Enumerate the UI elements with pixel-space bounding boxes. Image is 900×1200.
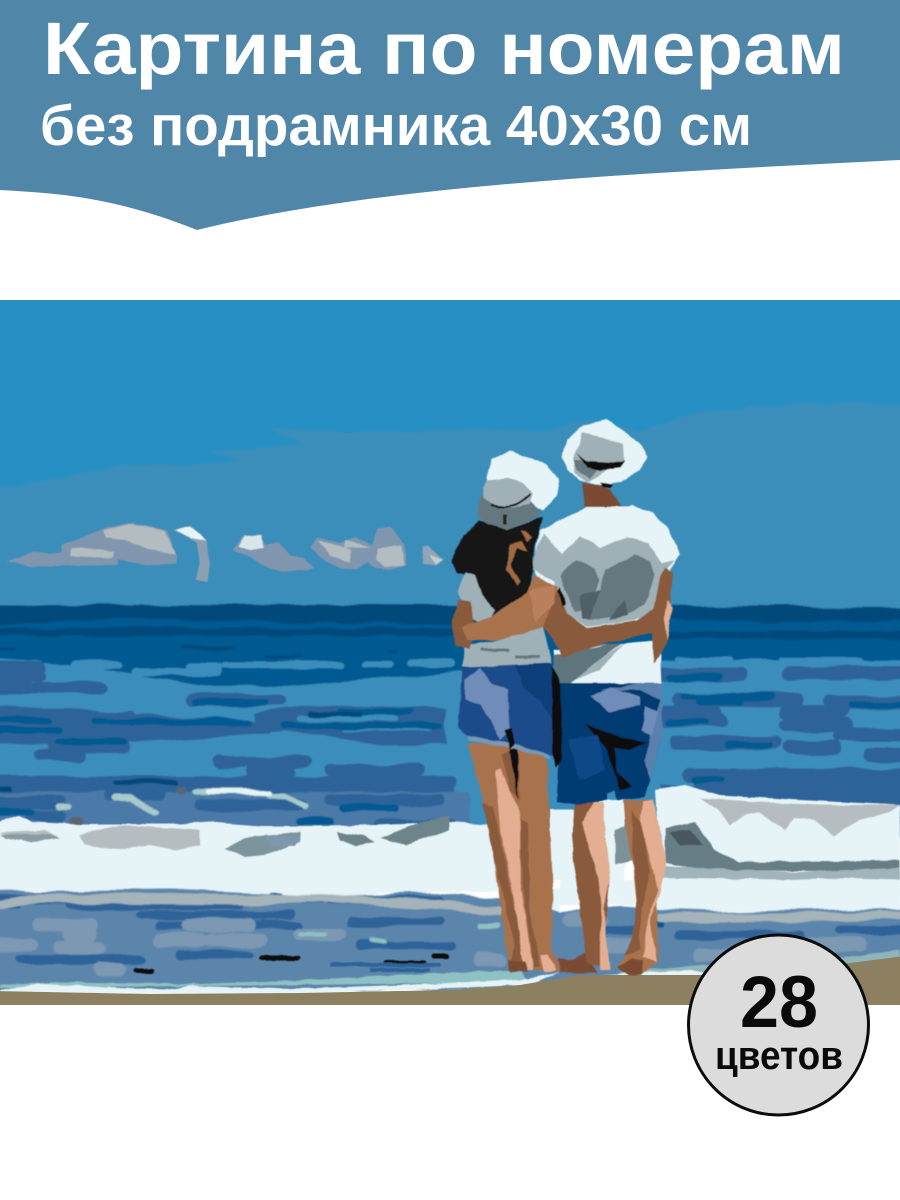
surf foam	[0, 785, 900, 912]
shallow water	[0, 890, 900, 990]
sky	[0, 290, 900, 610]
clouds	[7, 523, 443, 582]
man hat	[562, 420, 648, 488]
header banner	[0, 0, 900, 230]
man torso shirt	[532, 505, 680, 640]
sand	[0, 956, 900, 1005]
badge label: цветов	[715, 1034, 843, 1078]
man right arm	[652, 568, 673, 663]
man neck	[582, 482, 622, 507]
badge: 28 colours	[688, 935, 868, 1115]
man arm around woman	[530, 585, 660, 657]
man shorts	[557, 683, 662, 805]
man shirt lower	[552, 640, 662, 685]
badge number: 28	[740, 962, 818, 1043]
woman shirt and hand	[452, 572, 552, 667]
woman hat	[478, 450, 560, 530]
woman legs	[468, 743, 560, 972]
woman arm	[462, 575, 558, 640]
woman shorts	[458, 660, 562, 767]
woman hair	[451, 517, 543, 617]
sea	[0, 604, 900, 840]
man legs	[557, 800, 667, 976]
subtitle: без подрамника 40х30 см	[40, 94, 752, 158]
painting: couple on the beach	[0, 290, 900, 1010]
figures	[451, 420, 680, 976]
waterline and black pebbles	[0, 950, 900, 994]
title: Картина по номерам	[43, 7, 845, 90]
